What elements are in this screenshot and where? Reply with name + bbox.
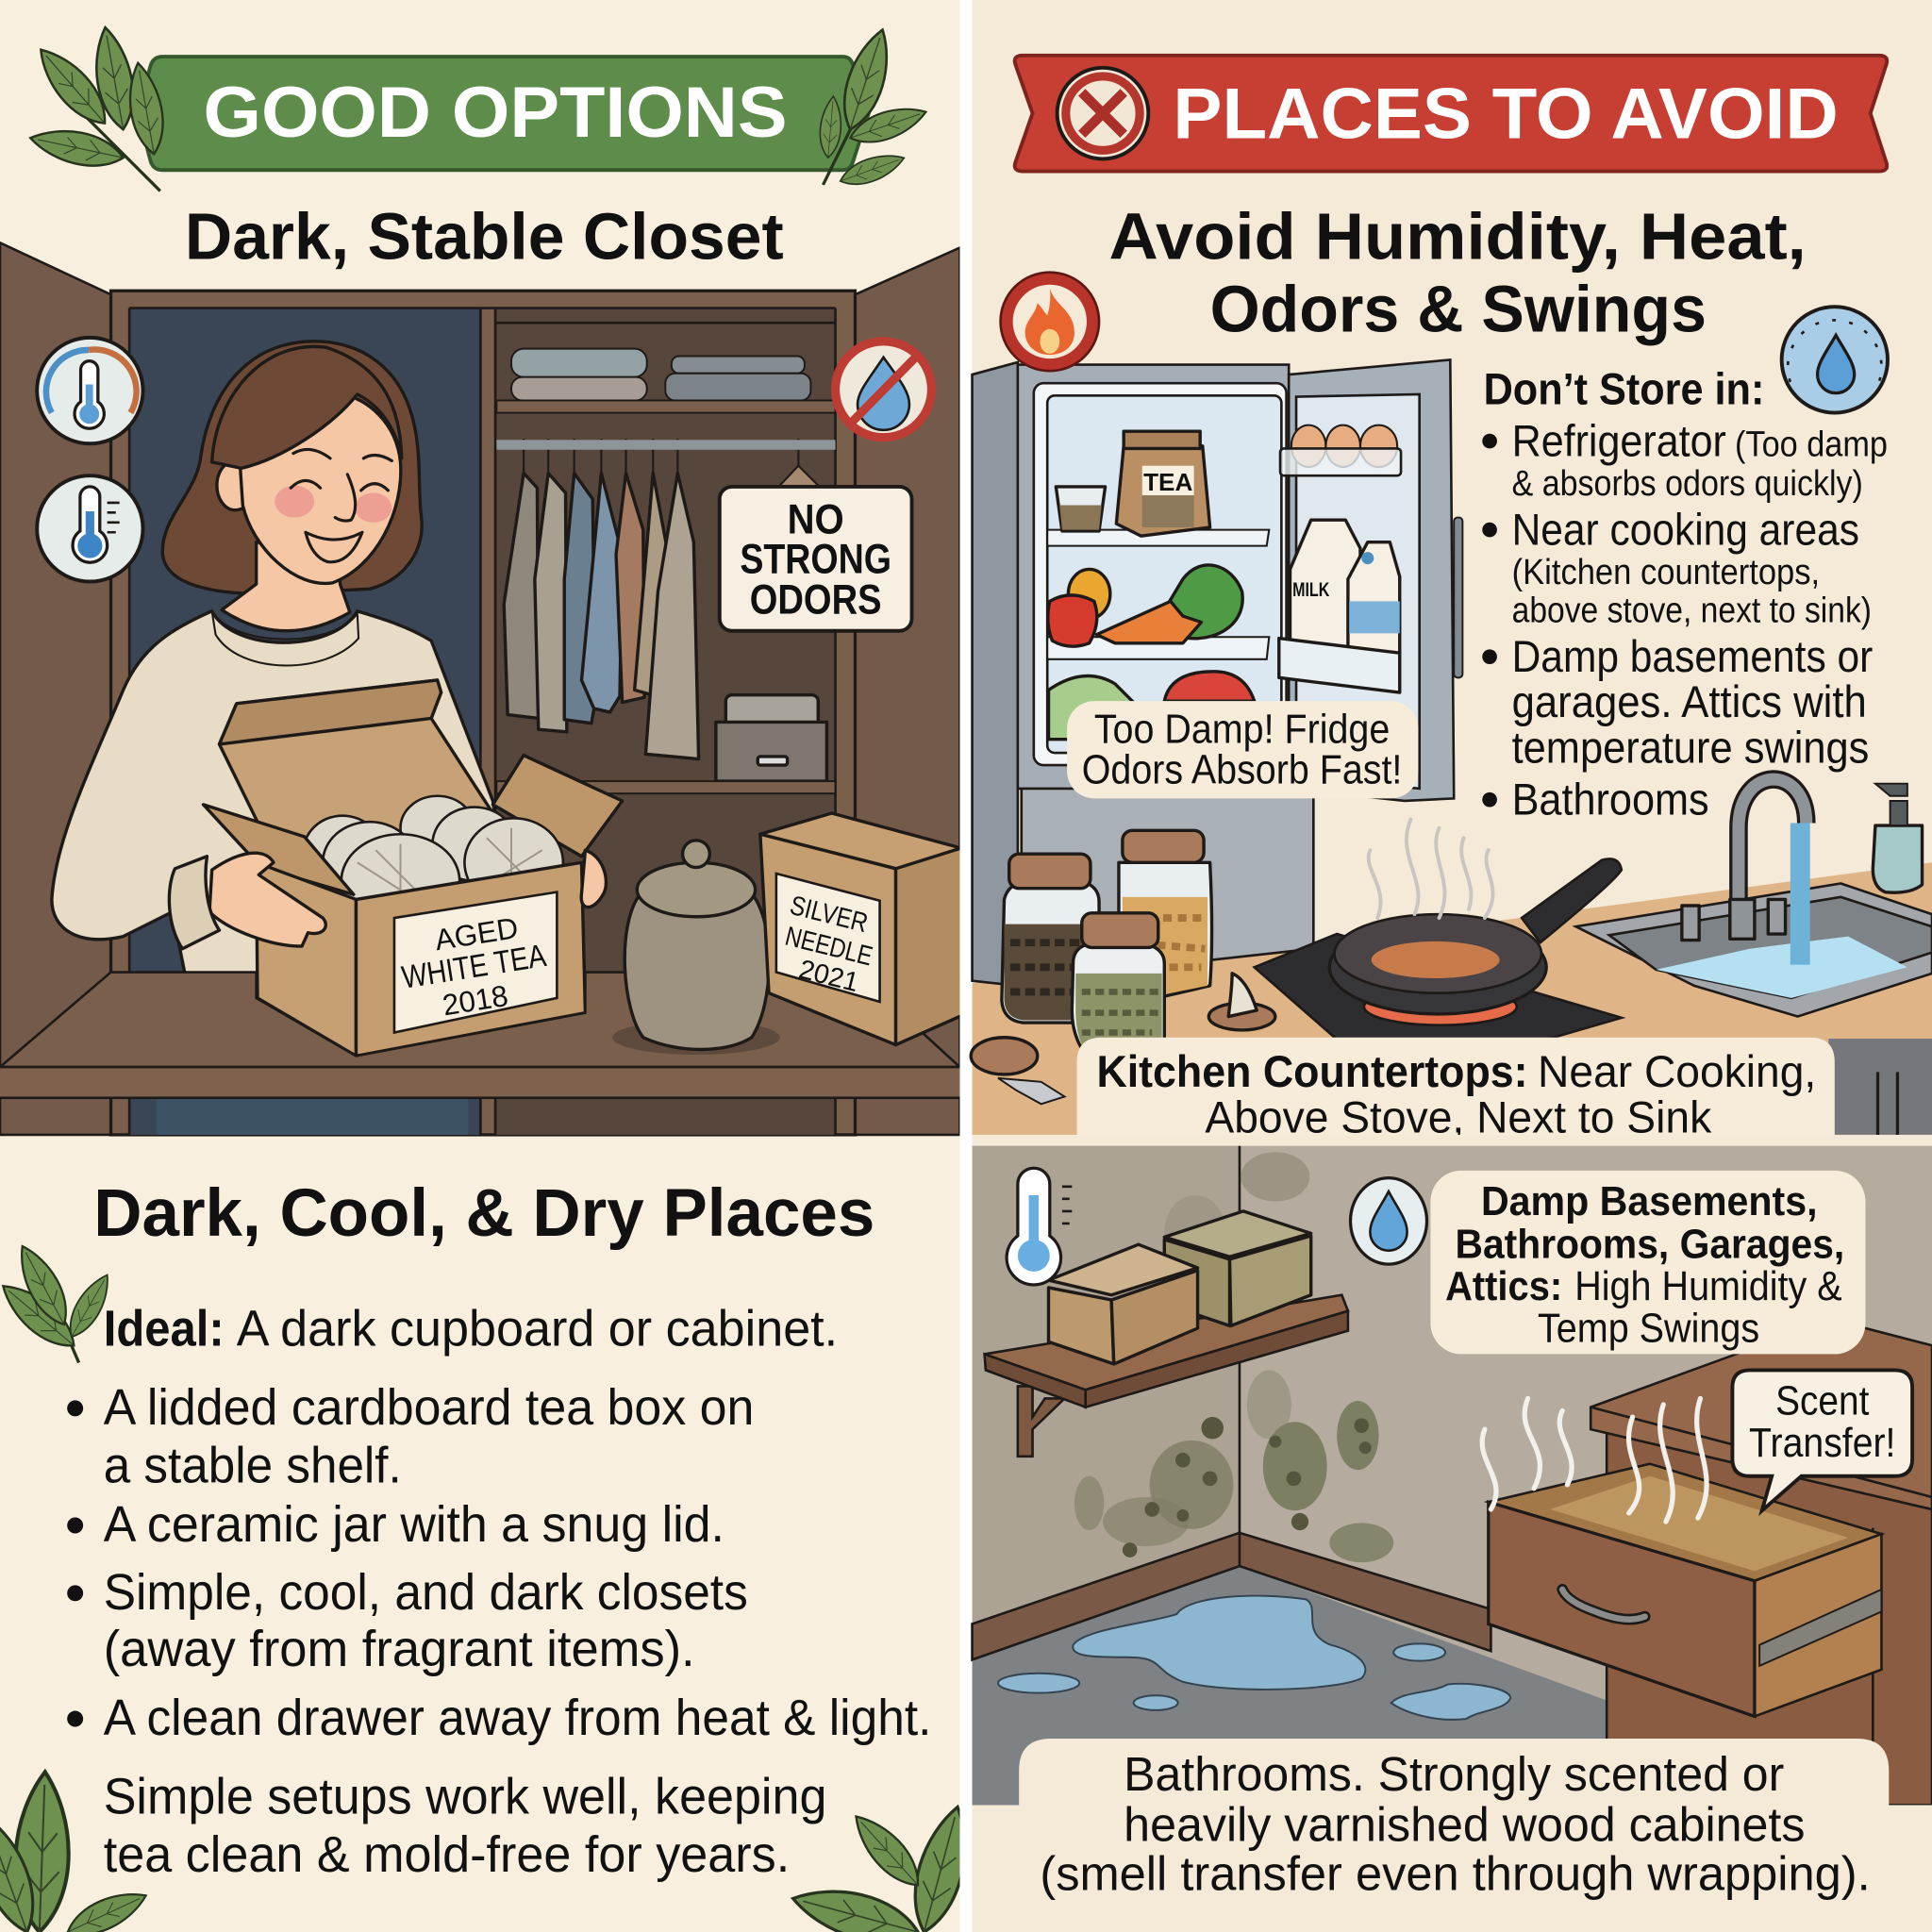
leaves: bottom left sprig [0,1771,152,1932]
steam [1369,820,1493,918]
icon: cool thermometer [37,475,143,581]
callout: too damp: Too Damp! Fridge [1094,708,1390,753]
banner: places to avoid [1015,56,1887,172]
heading: avoid humidity heat odors swings: Odors & Swings [1210,272,1707,345]
face [239,391,401,583]
leaves: top left sprig [27,25,169,191]
callout: kitchen countertops: Above Stove, Next to Sink [1205,1091,1712,1141]
small jar in fridge [1056,487,1106,531]
label: silver needle: SILVER [787,891,871,939]
callout: kitchen countertops [1077,1038,1835,1141]
callout: scent transfer: Transfer! [1749,1421,1895,1466]
text block: ideal storage list: (away from fragrant items). [104,1622,695,1677]
text block: do not store list: Bathrooms [1512,774,1709,824]
clothes rod and hanging garments [496,439,836,759]
callout: kitchen countertops: Near Cooking, [1538,1046,1816,1096]
label: aged white tea: AGED [433,911,521,957]
sweater [52,611,518,974]
drawer [1489,1464,1881,1716]
lower drawer produce [1049,672,1255,740]
tea box body [257,862,356,1056]
callout: damp basements: Temp Swings [1538,1306,1759,1351]
floor [973,1566,1607,1805]
callout: bathrooms and scented cabinets [973,1739,1932,1932]
callout: too damp [1067,701,1418,798]
tea jars [1002,830,1212,1055]
hair [162,341,422,594]
callout: damp basements: Damp Basements, [1481,1179,1818,1224]
icon: water drop [1351,1178,1426,1264]
text block: do not store list: & absorbs odors quickly) [1512,464,1863,504]
faucet and water [1682,779,1810,965]
text block: ideal storage list: Simple setups work well, keeping [104,1770,826,1825]
panel: good options [0,0,978,1932]
heading: avoid humidity heat odors swings [1109,199,1807,345]
panel: places to avoid [971,0,1932,1932]
text block: do not store list: Refrigerator [1512,415,1726,465]
puddles [998,1596,1510,1720]
text block: do not store list: (Kitchen countertops, [1512,553,1820,592]
label: silver needle [776,874,880,1002]
text block: ideal storage list [67,1301,931,1883]
baseboards [973,1533,1491,1659]
text block: do not store list: above stove, next to sink) [1512,591,1872,631]
sign: no strong odors [720,487,912,631]
vegetables [1048,565,1242,646]
text block: do not store list: Damp basements or [1512,631,1873,681]
sleeve cuff [169,857,219,949]
sink [1576,883,1932,1017]
callout: scent transfer [1732,1370,1912,1510]
counter [0,973,962,1098]
ceramic jar [612,841,780,1055]
leaves: side sprig [0,1240,117,1363]
icon: humidity gauge [1782,307,1888,413]
closet doors [0,242,959,1135]
damp box back [1164,1211,1311,1325]
milk cartons [1291,520,1400,653]
label: silver needle: 2021 [796,955,861,998]
box lid and rear flap [219,680,518,893]
cabinets [1828,1039,1932,1135]
neck [222,542,350,631]
collar [212,611,358,665]
text block: do not store list: Don’t Store in: [1484,363,1764,413]
mold patches [1074,1152,1393,1562]
heading: dark stable closet: Dark, Stable Closet [185,199,784,273]
stove and pan [1255,858,1622,1045]
label: aged white tea: WHITE TEA [399,938,549,996]
counter [973,862,1932,1140]
soap bottle [1873,784,1923,892]
illustration: kitchen scene [971,359,1932,1141]
icon: no moisture [833,339,934,440]
heading: dark cool dry places: Dark, Cool, & Dry Places [93,1175,874,1251]
text block: do not store list: (Too damp [1735,425,1888,464]
text block: ideal storage list: A ceramic jar with a snug lid. [104,1497,724,1553]
illustration: closet scene [0,242,962,1135]
storage box on lower shelf [496,695,836,793]
tea box left flap [204,805,354,894]
text block: do not store list: Near cooking areas [1512,504,1859,554]
leaves: bottom right sprig [788,1802,978,1932]
ear [217,460,254,510]
text block: ideal storage list: A clean drawer away from heat & light. [104,1690,931,1746]
icon: temperature gauge [37,338,143,443]
label: silver needle: NEEDLE [782,922,875,972]
fridge lower body and side [973,362,1018,986]
folded clothes on shelf [496,349,836,413]
heading: avoid humidity heat odors swings: Avoid Humidity, Heat, [1109,199,1807,273]
callout: too damp: Odors Absorb Fast! [1082,748,1402,793]
sign: no strong odors: NO [788,497,844,543]
desk [1591,1328,1932,1805]
text block: ideal storage list: Simple, cool, and dark closets [104,1565,748,1621]
banner: places to avoid: PLACES TO AVOID [1173,74,1839,154]
callout: damp basements: Attics: [1445,1264,1562,1309]
callout: damp basements: Bathrooms, Garages, [1456,1223,1844,1268]
sign: no strong odors: STRONG [740,536,891,582]
icon: fire [1001,273,1099,371]
tea bag in fridge [1116,431,1210,536]
text block: ideal storage list: A dark cupboard or cabinet. [237,1301,838,1357]
sign: no strong odors: ODORS [750,576,882,623]
leaves: top right sprig [818,25,930,192]
shelf with boxes [985,1211,1348,1457]
hanger behind sign [778,466,820,487]
scent wisps [1482,1398,1707,1522]
eggs [1291,425,1397,467]
text block: ideal storage list: a stable shelf. [104,1438,402,1493]
icon: x in circle [1058,68,1148,158]
garlic and spoon rest [971,974,1275,1104]
callout: damp basements [1430,1171,1865,1354]
text block: do not store list: garages. Attics with [1512,676,1867,726]
fridge interior [1018,365,1289,789]
damp box front [1049,1244,1198,1364]
callout: damp basements: High Humidity & [1574,1264,1842,1309]
label: aged white tea: 2018 [441,979,510,1022]
hand right [581,850,606,908]
text block: do not store list: temperature swings [1512,722,1869,772]
pants [157,1098,468,1135]
callout: scent transfer: Scent [1775,1378,1869,1424]
text block: ideal storage list: A lidded cardboard tea box on [104,1380,754,1436]
callout: bathrooms and scented cabinets: heavily varnished wood cabinets [1124,1797,1805,1851]
callout: bathrooms and scented cabinets: Bathrooms. Strongly scented or [1124,1747,1784,1801]
milk cartons: MILK [1292,579,1329,601]
fridge door [1279,359,1462,801]
text block: ideal storage list: Ideal: [104,1301,225,1357]
callout: kitchen countertops: Kitchen Countertops: [1096,1046,1528,1096]
callout: bathrooms and scented cabinets: (smell transfer even through wrapping). [1040,1847,1871,1901]
hand left [209,853,325,946]
tea bag in fridge: TEA [1143,468,1192,496]
text block: ideal storage list: tea clean & mold-free for years. [104,1827,790,1883]
label: aged white tea [394,892,557,1033]
illustration: damp basement scene [973,1146,1932,1805]
fringe [212,346,402,468]
right box flap [492,756,623,857]
woman holding tea box [52,341,623,1135]
icon: thermometer [1007,1168,1072,1285]
banner: good options [138,57,869,170]
banner: good options: GOOD OPTIONS [204,73,788,153]
silver needle box [760,813,962,1045]
tea cakes [303,796,563,928]
text block: do not store list [1482,363,1888,824]
